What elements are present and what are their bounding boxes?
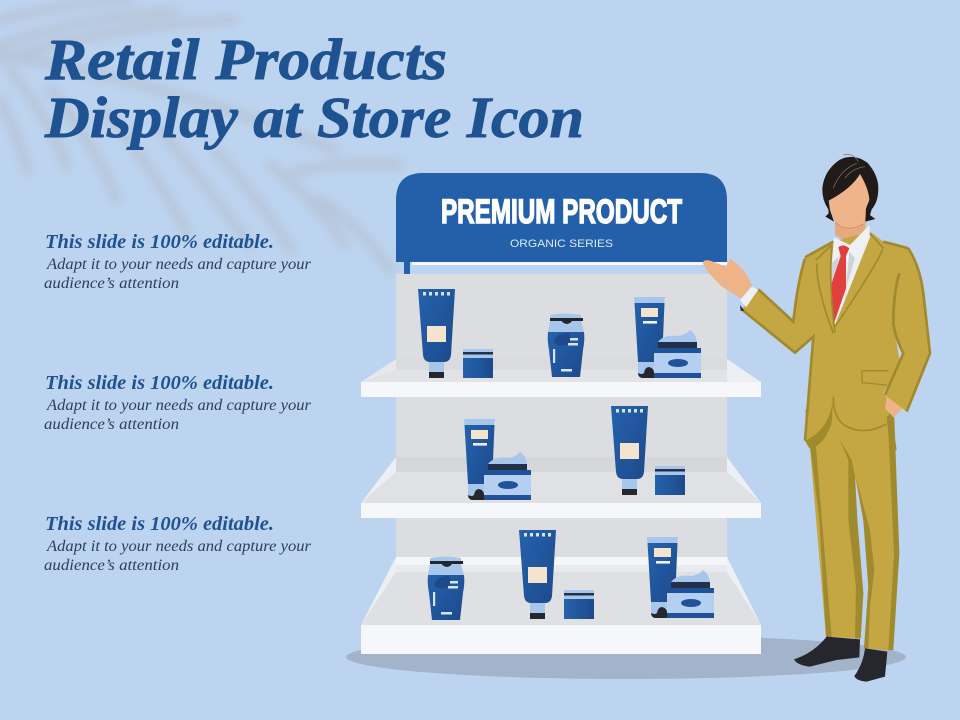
hair (822, 157, 878, 222)
bottle (428, 556, 464, 620)
tube and cream jar (634, 297, 701, 378)
hand (703, 258, 752, 299)
cuff (740, 287, 758, 307)
text block 3: Adapt it to your needs and capture your (46, 538, 312, 555)
text block 1: This slide is 100% editable. (45, 231, 274, 253)
pocket hand (885, 393, 904, 417)
text block 2: audience’s attention (44, 416, 179, 433)
text block 2 (44, 372, 312, 433)
text block 1 (44, 231, 312, 292)
text block 2: This slide is 100% editable. (45, 372, 274, 394)
sign subtitle: ORGANIC SERIES (510, 238, 613, 250)
products: shelf 2 (464, 406, 685, 500)
text block 3: This slide is 100% editable. (45, 513, 274, 535)
tube (519, 530, 556, 619)
bottle (548, 314, 584, 377)
title (44, 27, 584, 150)
text block 1: audience’s attention (44, 275, 179, 292)
products: shelf 3 (428, 530, 714, 620)
shirt and collar (830, 225, 870, 325)
tube (611, 406, 648, 495)
jacket (742, 232, 908, 442)
shelf 2 (361, 457, 761, 518)
title: Retail Products (44, 27, 447, 92)
products: shelf 1 (418, 289, 701, 378)
tie (830, 246, 849, 323)
title: Display at Store Icon (44, 85, 584, 150)
header sign (396, 173, 727, 274)
legs and shoes (794, 410, 899, 682)
salesman figure (703, 155, 931, 682)
torso and arms (703, 215, 931, 450)
text block 3: audience’s attention (44, 557, 179, 574)
neck (835, 215, 866, 244)
jar (463, 349, 493, 378)
tube and cream jar (647, 537, 714, 618)
text block 1: Adapt it to your needs and capture your (46, 256, 312, 273)
sign title: PREMIUM PRODUCT (441, 193, 682, 231)
jar (655, 466, 685, 495)
tube (418, 289, 455, 378)
shelf unit (361, 274, 761, 654)
lapels (816, 233, 883, 333)
tube and cream jar (464, 419, 531, 500)
head and hair (822, 155, 878, 230)
text block 3 (44, 513, 312, 574)
jar (564, 590, 594, 619)
face (829, 174, 870, 230)
shelf 3 (361, 557, 761, 654)
text block 2: Adapt it to your needs and capture your (46, 397, 312, 414)
palm leaf shadow (0, 0, 400, 270)
pocket (862, 371, 888, 385)
shelf 1 (361, 358, 761, 397)
floor shadow (346, 635, 906, 679)
back panel (396, 274, 727, 574)
